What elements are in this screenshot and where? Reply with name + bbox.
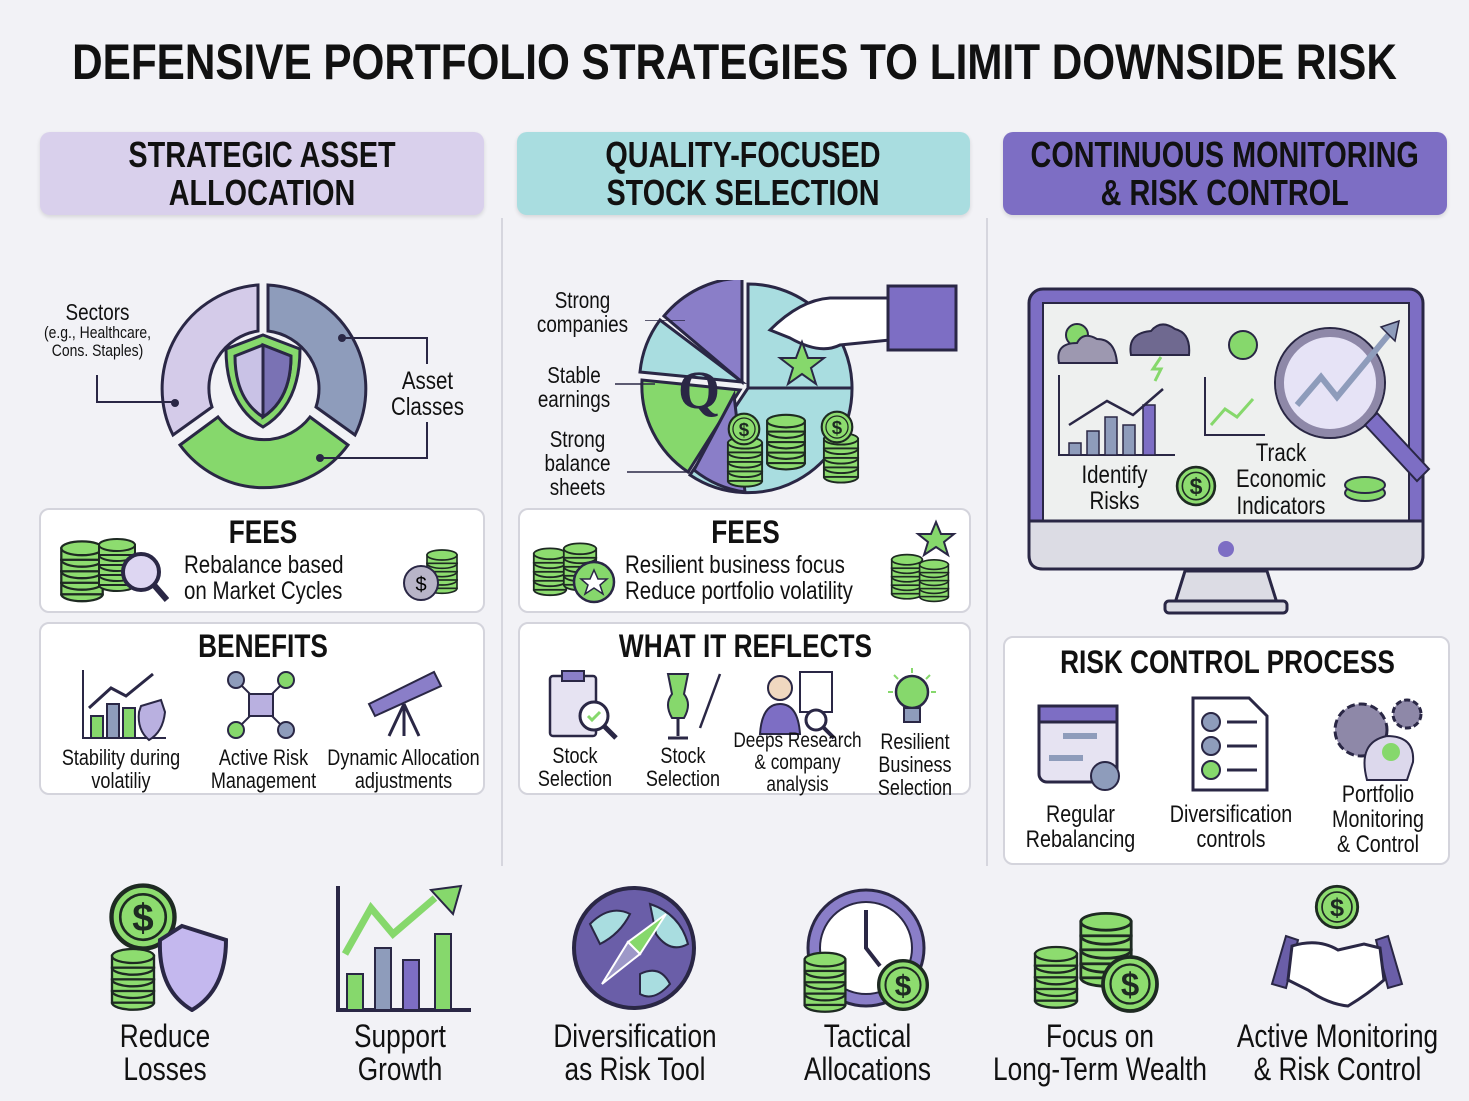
icon: coins magnifier: [60, 538, 169, 602]
box: fees 2: Resilient business focus: [625, 551, 845, 579]
text: Stable: [547, 362, 601, 388]
box: risk control process: [1003, 636, 1450, 865]
text: sheets: [550, 474, 605, 500]
box: fees 1: [39, 508, 485, 613]
bottom: long-term wealth: Focus on: [1046, 1018, 1154, 1054]
bottom: tactical allocations: Allocations: [804, 1051, 931, 1087]
icon: coins star: [532, 542, 616, 604]
box: what it reflects: Selection: [646, 766, 720, 791]
label: sectors: (e.g., Healthcare,: [44, 323, 151, 342]
box: benefits: Management: [211, 768, 316, 793]
bottom: long-term wealth: [993, 912, 1207, 1087]
box: what it reflects: Resilient: [880, 729, 950, 754]
bottom: reduce losses: Losses: [123, 1051, 207, 1087]
box: what it reflects: Selection: [878, 775, 952, 800]
box: risk control process: Monitoring: [1332, 806, 1424, 833]
bottom: reduce losses: Reduce: [120, 1018, 210, 1054]
icon: bulb: [888, 668, 936, 723]
icon: document: [1192, 696, 1268, 792]
box: benefits: adjustments: [355, 768, 452, 793]
box: what it reflects: Stock: [552, 743, 598, 768]
bottom: diversification: as Risk Tool: [565, 1051, 705, 1087]
box: what it reflects: Selection: [538, 766, 612, 791]
heading: quality-focused stock selection: [517, 132, 970, 215]
bottom: tactical allocations: Tactical: [824, 1018, 911, 1054]
labels: quality pie: Strong: [555, 287, 610, 313]
box: fees 1: Rebalance based: [184, 551, 344, 579]
icon: network: [227, 671, 295, 739]
bottom: active monitoring: Active Monitoring: [1237, 1018, 1438, 1054]
box: risk control process: RISK CONTROL PROCESS: [1060, 644, 1395, 680]
icon: mannequin: [666, 673, 722, 740]
box: risk control process: & Control: [1337, 831, 1419, 858]
box: risk control process: Rebalancing: [1026, 826, 1135, 853]
pie chart: quality: Q: [678, 360, 720, 420]
bottom: long-term wealth: Long-Term Wealth: [993, 1051, 1207, 1087]
heading: continuous monitoring: & RISK CONTROL: [1101, 172, 1349, 212]
heading: quality-focused stock selection: QUALITY-FOCUSED: [606, 134, 881, 174]
box: fees 2: Reduce portfolio volatility: [625, 577, 853, 605]
box: risk control process: Diversification: [1170, 801, 1292, 828]
box: benefits: volatiliy: [91, 768, 151, 793]
label: sectors: Cons. Staples): [52, 341, 143, 360]
label: sectors: [44, 299, 151, 360]
icon: coin: [403, 549, 458, 601]
labels: quality pie: [537, 287, 628, 337]
bottom: active monitoring: [1237, 884, 1438, 1087]
bottom: support growth: [336, 884, 471, 1087]
box: risk control process: Portfolio: [1342, 781, 1414, 808]
box: what it reflects: Deeps Research: [733, 729, 862, 752]
text: earnings: [538, 386, 610, 412]
box: benefits: Stability during: [62, 745, 180, 770]
text: Strong: [550, 426, 605, 452]
label: asset classes: Classes: [391, 393, 464, 421]
box: benefits: Dynamic Allocation: [327, 745, 480, 770]
bottom: diversification: [553, 886, 717, 1087]
icon: stability chart: [82, 670, 166, 742]
box: benefits: BENEFITS: [198, 628, 328, 664]
icon: research person: [758, 671, 836, 740]
box: fees 1: FEES: [229, 514, 297, 550]
monitor labels: Risks: [1089, 487, 1140, 515]
bottom: reduce losses: [109, 883, 228, 1087]
box: risk control process: controls: [1197, 826, 1265, 853]
heading: quality-focused stock selection: STOCK SELECTION: [607, 172, 880, 212]
heading: strategic asset allocation: STRATEGIC ASSET: [128, 134, 396, 174]
labels: quality pie: companies: [537, 311, 628, 337]
box: what it reflects: [518, 622, 971, 795]
icon: telescope: [368, 670, 442, 737]
monitor: [1028, 288, 1430, 614]
box: what it reflects: WHAT IT REFLECTS: [619, 628, 872, 664]
bottom: support growth: Support: [354, 1018, 446, 1054]
pie chart: quality: [638, 280, 958, 494]
text: Indicators: [1237, 492, 1325, 520]
heading: continuous monitoring: CONTINUOUS MONITORING: [1031, 134, 1419, 174]
box: what it reflects: Business: [878, 752, 952, 777]
icon: gears head: [1334, 698, 1422, 781]
bottom: tactical allocations: [803, 888, 931, 1087]
box: what it reflects: Stock: [660, 743, 706, 768]
icon: clipboard: [548, 670, 618, 740]
text: balance: [544, 450, 611, 476]
monitor labels: Identify: [1081, 461, 1148, 489]
connector lines: [96, 337, 428, 459]
icon: coins with star: [890, 520, 957, 602]
heading: continuous monitoring: [1003, 132, 1447, 215]
bottom: diversification: Diversification: [553, 1018, 717, 1054]
box: fees 1: on Market Cycles: [184, 577, 342, 605]
box: what it reflects: analysis: [766, 773, 829, 796]
box: risk control process: Regular: [1046, 801, 1115, 828]
text: Track: [1256, 439, 1306, 467]
heading: strategic asset allocation: ALLOCATION: [169, 172, 355, 212]
donut chart: allocation: [160, 283, 368, 490]
label: asset classes: [391, 367, 464, 421]
heading: strategic asset allocation: [40, 132, 484, 215]
label: asset classes: Asset: [402, 367, 453, 395]
box: fees 2: FEES: [711, 514, 780, 550]
box: benefits: [39, 622, 485, 795]
label: sectors: Sectors: [66, 299, 129, 325]
icon: coin: $: [415, 574, 427, 596]
box: benefits: Active Risk: [219, 745, 308, 770]
bottom: support growth: Growth: [358, 1051, 442, 1087]
monitor labels: [1081, 461, 1148, 515]
title: DEFENSIVE PORTFOLIO STRATEGIES TO LIMIT DOWNSIDE RISK: [72, 34, 1397, 90]
icon: calendar rebalancing: [1038, 704, 1120, 791]
box: what it reflects: & company: [754, 751, 841, 774]
bottom: active monitoring: & Risk Control: [1254, 1051, 1421, 1087]
box: fees 2: [518, 508, 971, 613]
divider lines: [501, 218, 503, 866]
text: Economic: [1236, 465, 1326, 493]
